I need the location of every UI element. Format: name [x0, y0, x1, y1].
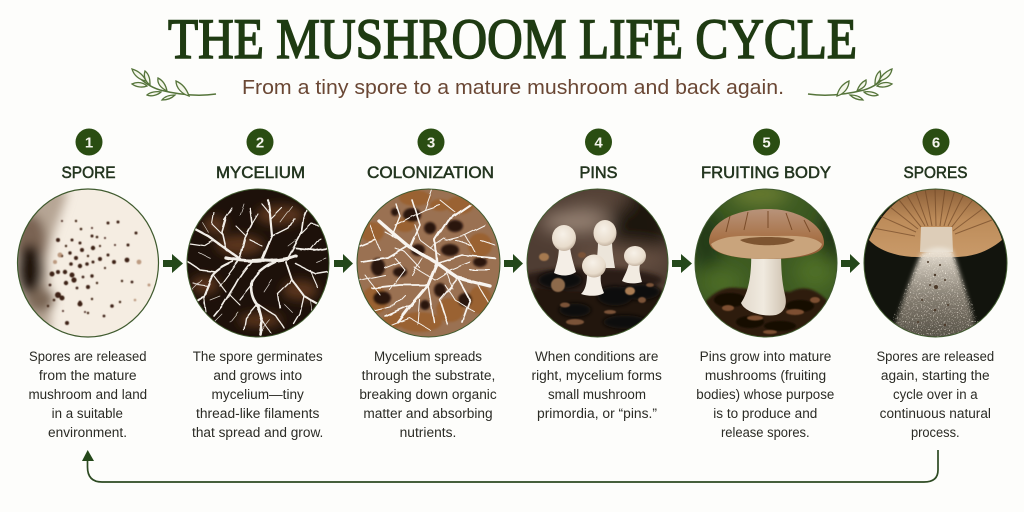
description: that spread and grow. [192, 425, 323, 440]
image: mushroom pins emerging from soil [528, 190, 668, 336]
description: mycelium—tiny [212, 387, 304, 402]
description: cycle over in a [893, 387, 978, 402]
description: matter and absorbing [363, 406, 493, 421]
description: bodies) whose purpose [696, 387, 834, 402]
icon: left leaf sprig [132, 69, 216, 100]
step number 6 [922, 128, 950, 156]
description [28, 349, 147, 440]
panel: spore [10, 128, 161, 440]
description: mushrooms (fruiting [705, 368, 826, 383]
image outline [18, 189, 158, 337]
step number 5: 5 [762, 134, 771, 152]
description: When conditions are [535, 349, 658, 364]
panel: mycelium [185, 128, 331, 440]
image: white mycelium network on soil [185, 187, 331, 339]
description: Spores are released [29, 349, 147, 364]
step number 1: 1 [85, 134, 93, 152]
description [876, 349, 994, 440]
image: spores on pale surface [18, 190, 158, 336]
arrow 5 to 6 [841, 254, 860, 273]
image outline [864, 189, 1007, 337]
image outline [187, 189, 329, 337]
return arrow from step 6 back to step 1 [82, 450, 938, 482]
arrow 2 to 3 [334, 254, 353, 273]
description: from the mature [39, 368, 137, 383]
image: mature mushroom [696, 190, 836, 336]
panel: fruiting body [688, 128, 846, 440]
description: in a suitable [52, 406, 123, 421]
image: mycelium colonizing substrate [355, 187, 502, 339]
description: breaking down organic [359, 387, 497, 402]
description: Mycelium spreads [374, 349, 482, 364]
description: environment. [48, 425, 127, 440]
description: is to produce and [713, 406, 817, 421]
description: The spore germinates [193, 349, 323, 364]
description [696, 349, 834, 440]
panel: spores [862, 128, 1009, 440]
image outline [695, 189, 837, 337]
step number 2: 2 [256, 134, 264, 152]
description: release spores. [721, 425, 810, 440]
description: again, starting the [881, 368, 990, 383]
image: mushroom releasing spores [862, 187, 1009, 340]
description: through the substrate, [362, 368, 495, 383]
heading: pins: PINS [580, 163, 618, 182]
step number 2 [246, 128, 274, 156]
step number 4: 4 [594, 134, 603, 152]
step number 3 [418, 128, 444, 156]
step number 6: 6 [932, 134, 940, 152]
description [532, 349, 662, 421]
heading: spore: SPORE [62, 163, 116, 182]
heading: spores: SPORES [904, 163, 968, 182]
description: Pins grow into mature [700, 349, 831, 364]
description: process. [911, 425, 960, 440]
heading: mycelium: MYCELIUM [216, 163, 305, 182]
image outline [527, 189, 668, 337]
heading: colonization: COLONIZATION [367, 163, 494, 182]
description: mushroom and land [28, 387, 147, 402]
arrow 3 to 4 [504, 254, 523, 273]
subtitle: From a tiny spore to a mature mushroom and back again. [242, 77, 784, 99]
step number 5 [753, 128, 780, 156]
description: thread-like filaments [196, 406, 320, 421]
description: continuous natural [880, 406, 991, 421]
arrow 4 to 5 [672, 254, 692, 273]
description [359, 349, 497, 440]
step number 3: 3 [427, 134, 435, 152]
panel: pins [526, 128, 668, 421]
icon: right leaf sprig [808, 69, 892, 100]
step number 4 [585, 128, 612, 156]
description [192, 349, 323, 440]
description: right, mycelium forms [532, 368, 662, 383]
description: and grows into [213, 368, 302, 383]
description: primordia, or “pins.” [537, 406, 657, 421]
heading: fruiting body: FRUITING BODY [701, 163, 831, 182]
title: THE MUSHROOM LIFE CYCLE [168, 8, 857, 71]
step number 1 [76, 128, 102, 156]
arrow 1 to 2 [163, 254, 183, 273]
description: nutrients. [400, 425, 456, 440]
image outline [357, 189, 500, 337]
description: small mushroom [548, 387, 646, 402]
panel: colonization [355, 128, 502, 440]
description: Spores are released [876, 349, 994, 364]
